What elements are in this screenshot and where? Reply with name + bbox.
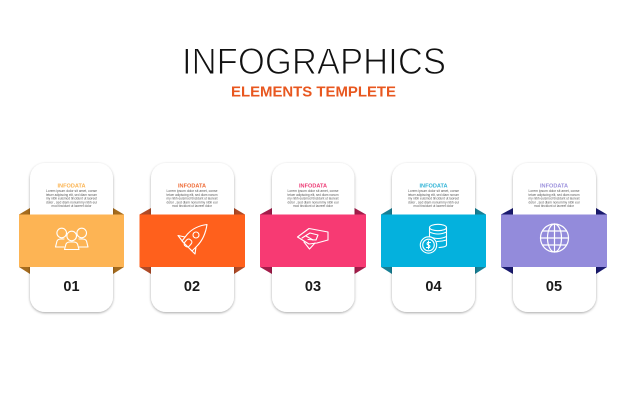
body text: tetuer adipiscing elit, sed diam nonum [408,193,459,197]
body text: Lorem ipsum dolor sit amet, conse [46,189,97,193]
body text [528,189,580,208]
number: 04 [425,279,442,295]
body text [288,189,339,208]
body text [166,189,218,208]
body text: Lorem ipsum dolor sit amet, conse [166,189,218,193]
panel: step 01 [19,163,124,312]
number: 01 [63,279,80,295]
band [501,214,607,267]
body text: Lorem ipsum dolor sit amet, conse [288,189,339,193]
body text: tetuer adipiscing elit, sed diam nonum [528,193,580,197]
heading: INFODATA [420,184,448,190]
folds [19,208,124,274]
body text [46,189,97,208]
body text: tetuer adipiscing elit, sed diam nonum [288,193,339,197]
folds [260,208,366,274]
panel: step 05 [501,163,607,312]
panel: step 04 [381,163,486,312]
heading: INFODATA [540,184,568,190]
body text: my nibh euismod tincidunt ut laoreet [408,197,459,201]
icon: people [56,228,88,250]
body text: my nibh euismod tincidunt ut laoreet [166,197,218,201]
body text: mod tincidunt ut laoreet dolor [293,204,334,208]
icon: rocket [178,224,207,254]
body text: dolor , sed diam nonummy nibh eui [528,200,580,204]
body text: dolor , sed diam nonummy nibh eui [408,200,459,204]
body text: my nibh euismod tincidunt ut laoreet [46,197,97,201]
body text: mod tincidunt ut laoreet dolor [534,204,575,208]
body text: Lorem ipsum dolor sit amet, conse [408,189,459,193]
body text: my nibh euismod tincidunt ut laoreet [288,197,339,201]
number: 05 [546,279,562,295]
card [151,163,234,312]
body text: tetuer adipiscing elit, sed diam nonum [46,193,97,197]
body text: dolor , sed diam nonummy nibh eui [288,200,339,204]
number: 03 [305,279,321,295]
title: INFOGRAPHICS [182,41,446,82]
heading: INFODATA [178,184,206,190]
icon: globe [540,224,568,252]
body text: mod tincidunt ut laoreet dolor [414,204,454,208]
folds [501,208,607,274]
panel: step 02 [140,163,245,312]
band [140,214,245,267]
icon: coins [420,224,446,253]
body text: my nibh euismod tincidunt ut laoreet [528,197,580,201]
body text: dolor , sed diam nonummy nibh eui [46,200,97,204]
heading: INFODATA [58,184,86,190]
band [381,214,486,267]
body text: Lorem ipsum dolor sit amet, conse [528,189,580,193]
folds [381,208,486,274]
card [392,163,475,312]
body text: mod tincidunt ut laoreet dolor [172,204,213,208]
band [260,214,366,267]
subtitle: ELEMENTS TEMPLETE [231,84,396,100]
panel: step 03 [260,163,366,312]
body text: dolor , sed diam nonummy nibh eui [166,200,218,204]
number: 02 [184,279,200,295]
card [30,163,113,312]
card [272,163,354,312]
body text: tetuer adipiscing elit, sed diam nonum [166,193,218,197]
band [19,214,124,267]
icon: hand with card [298,228,328,249]
body text [408,189,459,208]
folds [140,208,245,274]
card [513,163,596,312]
body text: mod tincidunt ut laoreet dolor [52,204,92,208]
heading: INFODATA [299,184,327,190]
